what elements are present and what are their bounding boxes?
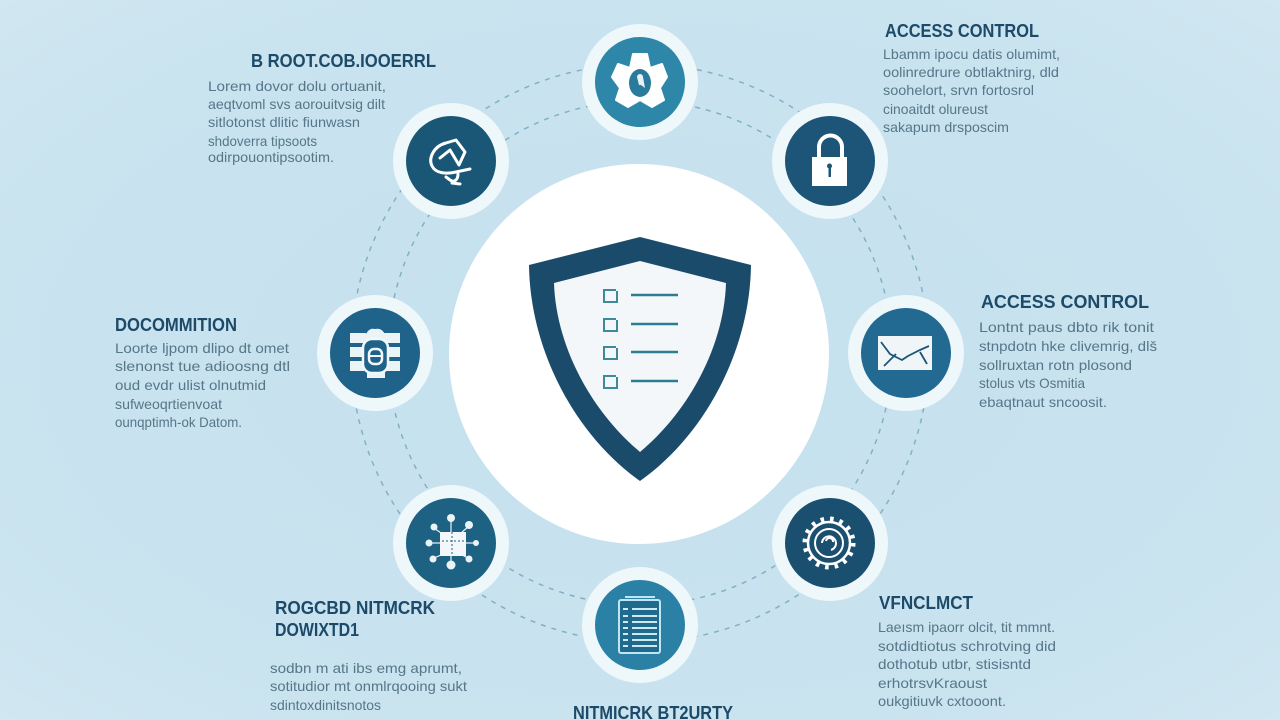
text block: bottom right: oukgitiuvk cxtooont. — [878, 693, 1006, 709]
checklist — [604, 290, 678, 388]
text block: top right: soohelort, srvn fortosrol — [883, 82, 1034, 98]
text block: bottom right — [878, 592, 1056, 709]
text block: middle right: stnpdotn hke clivemrig, dlš — [979, 338, 1157, 354]
icon: gear with shield — [582, 24, 698, 140]
text block: bottom right: Laeısm ipaorr olcit, tit mmnt. — [878, 619, 1055, 635]
text block: top left: odirpouontipsootim. — [208, 149, 334, 165]
text block: bottom right: sotdidtiotus schrotving did — [878, 638, 1056, 654]
text block: bottom right: VFNCLMCT — [879, 592, 974, 613]
text block: top left: sitlotonst dlitic fiunwasn — [208, 114, 360, 130]
icon: network hub — [393, 485, 509, 601]
text block: middle left: slenonst tue adioosng dtl — [115, 358, 290, 374]
text block: bottom left: sotitudior mt onmlrqooing sukt — [270, 678, 467, 694]
text block: top left: B ROOT.COB.IOOERRL — [251, 50, 436, 71]
icon: clipboard document — [582, 567, 698, 683]
text block: middle right — [979, 291, 1157, 410]
dashed orbit rings — [351, 64, 929, 642]
text block: middle left: oud evdr ulist olnutmid — [115, 377, 266, 393]
text block: middle left: DOCOMMITION — [115, 314, 237, 335]
central white disc — [449, 164, 829, 544]
text block: top right: cinoaitdt olureust — [883, 101, 988, 117]
text block: top right: sakapum drsposcim — [883, 119, 1009, 135]
icon: padlock — [772, 103, 888, 219]
text block: middle right: ACCESS CONTROL — [981, 291, 1149, 312]
text block: middle right: sollruxtan rotn plosond — [979, 357, 1132, 373]
text block: top right — [883, 20, 1060, 135]
icon: fingerprint gear — [772, 485, 888, 601]
icon: envelope — [848, 295, 964, 411]
text block: middle right: Lontnt paus dbto rik tonit — [979, 319, 1154, 335]
text block: bottom left: ROGCBD NITMCRK — [275, 597, 436, 618]
text block: top left: aeqtvoml svs aorouitvsig dilt — [208, 96, 385, 112]
text block: middle left: ounqptimh-ok Datom. — [115, 414, 242, 430]
text block: middle right: ebaqtnaut sncoosit. — [979, 394, 1107, 410]
text block: bottom left: DOWIXTD1 — [275, 619, 359, 640]
text block: top right: Lbamm ipocu datis olumimt, — [883, 46, 1060, 62]
text block: bottom left: sodbn m ati ibs emg aprumt, — [270, 660, 462, 676]
text block: middle left: sufweoqrtienvoat — [115, 396, 222, 412]
text block: middle left: Loorte ljpom dlipo dt omet — [115, 340, 289, 356]
text block: bottom right: dothotub utbr, stisisntd — [878, 656, 1031, 672]
text block: middle right: stolus vts Osmitia — [979, 375, 1085, 391]
text block: top left: shdoverra tipsoots — [208, 133, 317, 149]
icon: firewall with lock — [317, 295, 433, 411]
central shield with checklist — [529, 237, 751, 481]
text block: bottom right: erhotrsvKraoust — [878, 675, 987, 691]
text block: top left — [208, 50, 436, 165]
text block: top right: ACCESS CONTROL — [885, 20, 1039, 41]
text block: bottom left — [270, 597, 467, 713]
icon: stethoscope — [393, 103, 509, 219]
text block: top right: oolinredrure obtlaktnirg, dld — [883, 64, 1059, 80]
text block: bottom left: sdintoxdinitsnotos — [270, 697, 381, 713]
text block: top left: Lorem dovor dolu ortuanit, — [208, 78, 386, 94]
text block: middle left — [115, 314, 290, 430]
